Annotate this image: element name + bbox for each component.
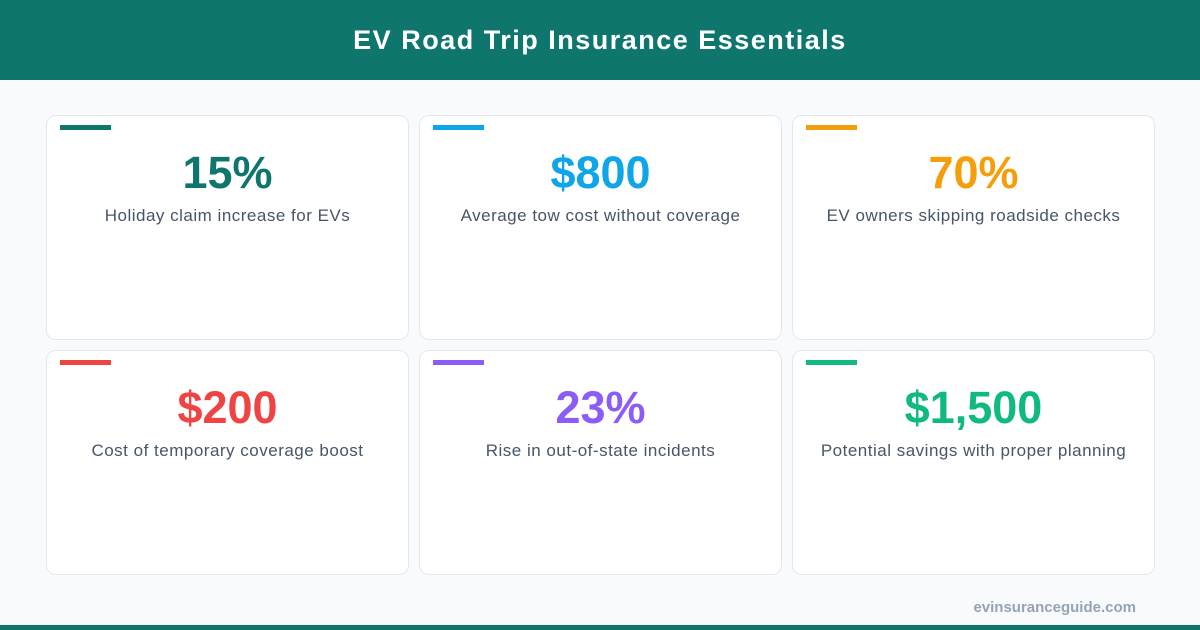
card: 15%: Holiday claim increase for EVs <box>105 206 350 225</box>
card: 70% <box>792 115 1155 340</box>
card: 15%: 15% <box>182 147 273 198</box>
footer url: evinsuranceguide.com <box>973 599 1136 616</box>
title: EV Road Trip Insurance Essentials <box>353 25 847 55</box>
card: $800: Average tow cost without coverage <box>461 206 740 225</box>
card: $1,500 <box>792 350 1155 575</box>
card: 23%: 23% <box>555 382 646 433</box>
card: $200: $200 <box>177 382 278 433</box>
card: $1,500: Potential savings with proper planning <box>821 441 1126 460</box>
card: 23% <box>419 350 782 575</box>
card: $800 <box>419 115 782 340</box>
card: 70%: EV owners skipping roadside checks <box>827 206 1120 225</box>
card: 70%: 70% <box>928 147 1019 198</box>
card: $200: Cost of temporary coverage boost <box>91 441 364 460</box>
card: $800: $800 <box>550 147 651 198</box>
card: 15% <box>46 115 409 340</box>
title <box>0 0 1200 80</box>
card: $1,500: $1,500 <box>905 382 1042 433</box>
card: $200 <box>46 350 409 575</box>
card: 23%: Rise in out-of-state incidents <box>486 441 715 460</box>
